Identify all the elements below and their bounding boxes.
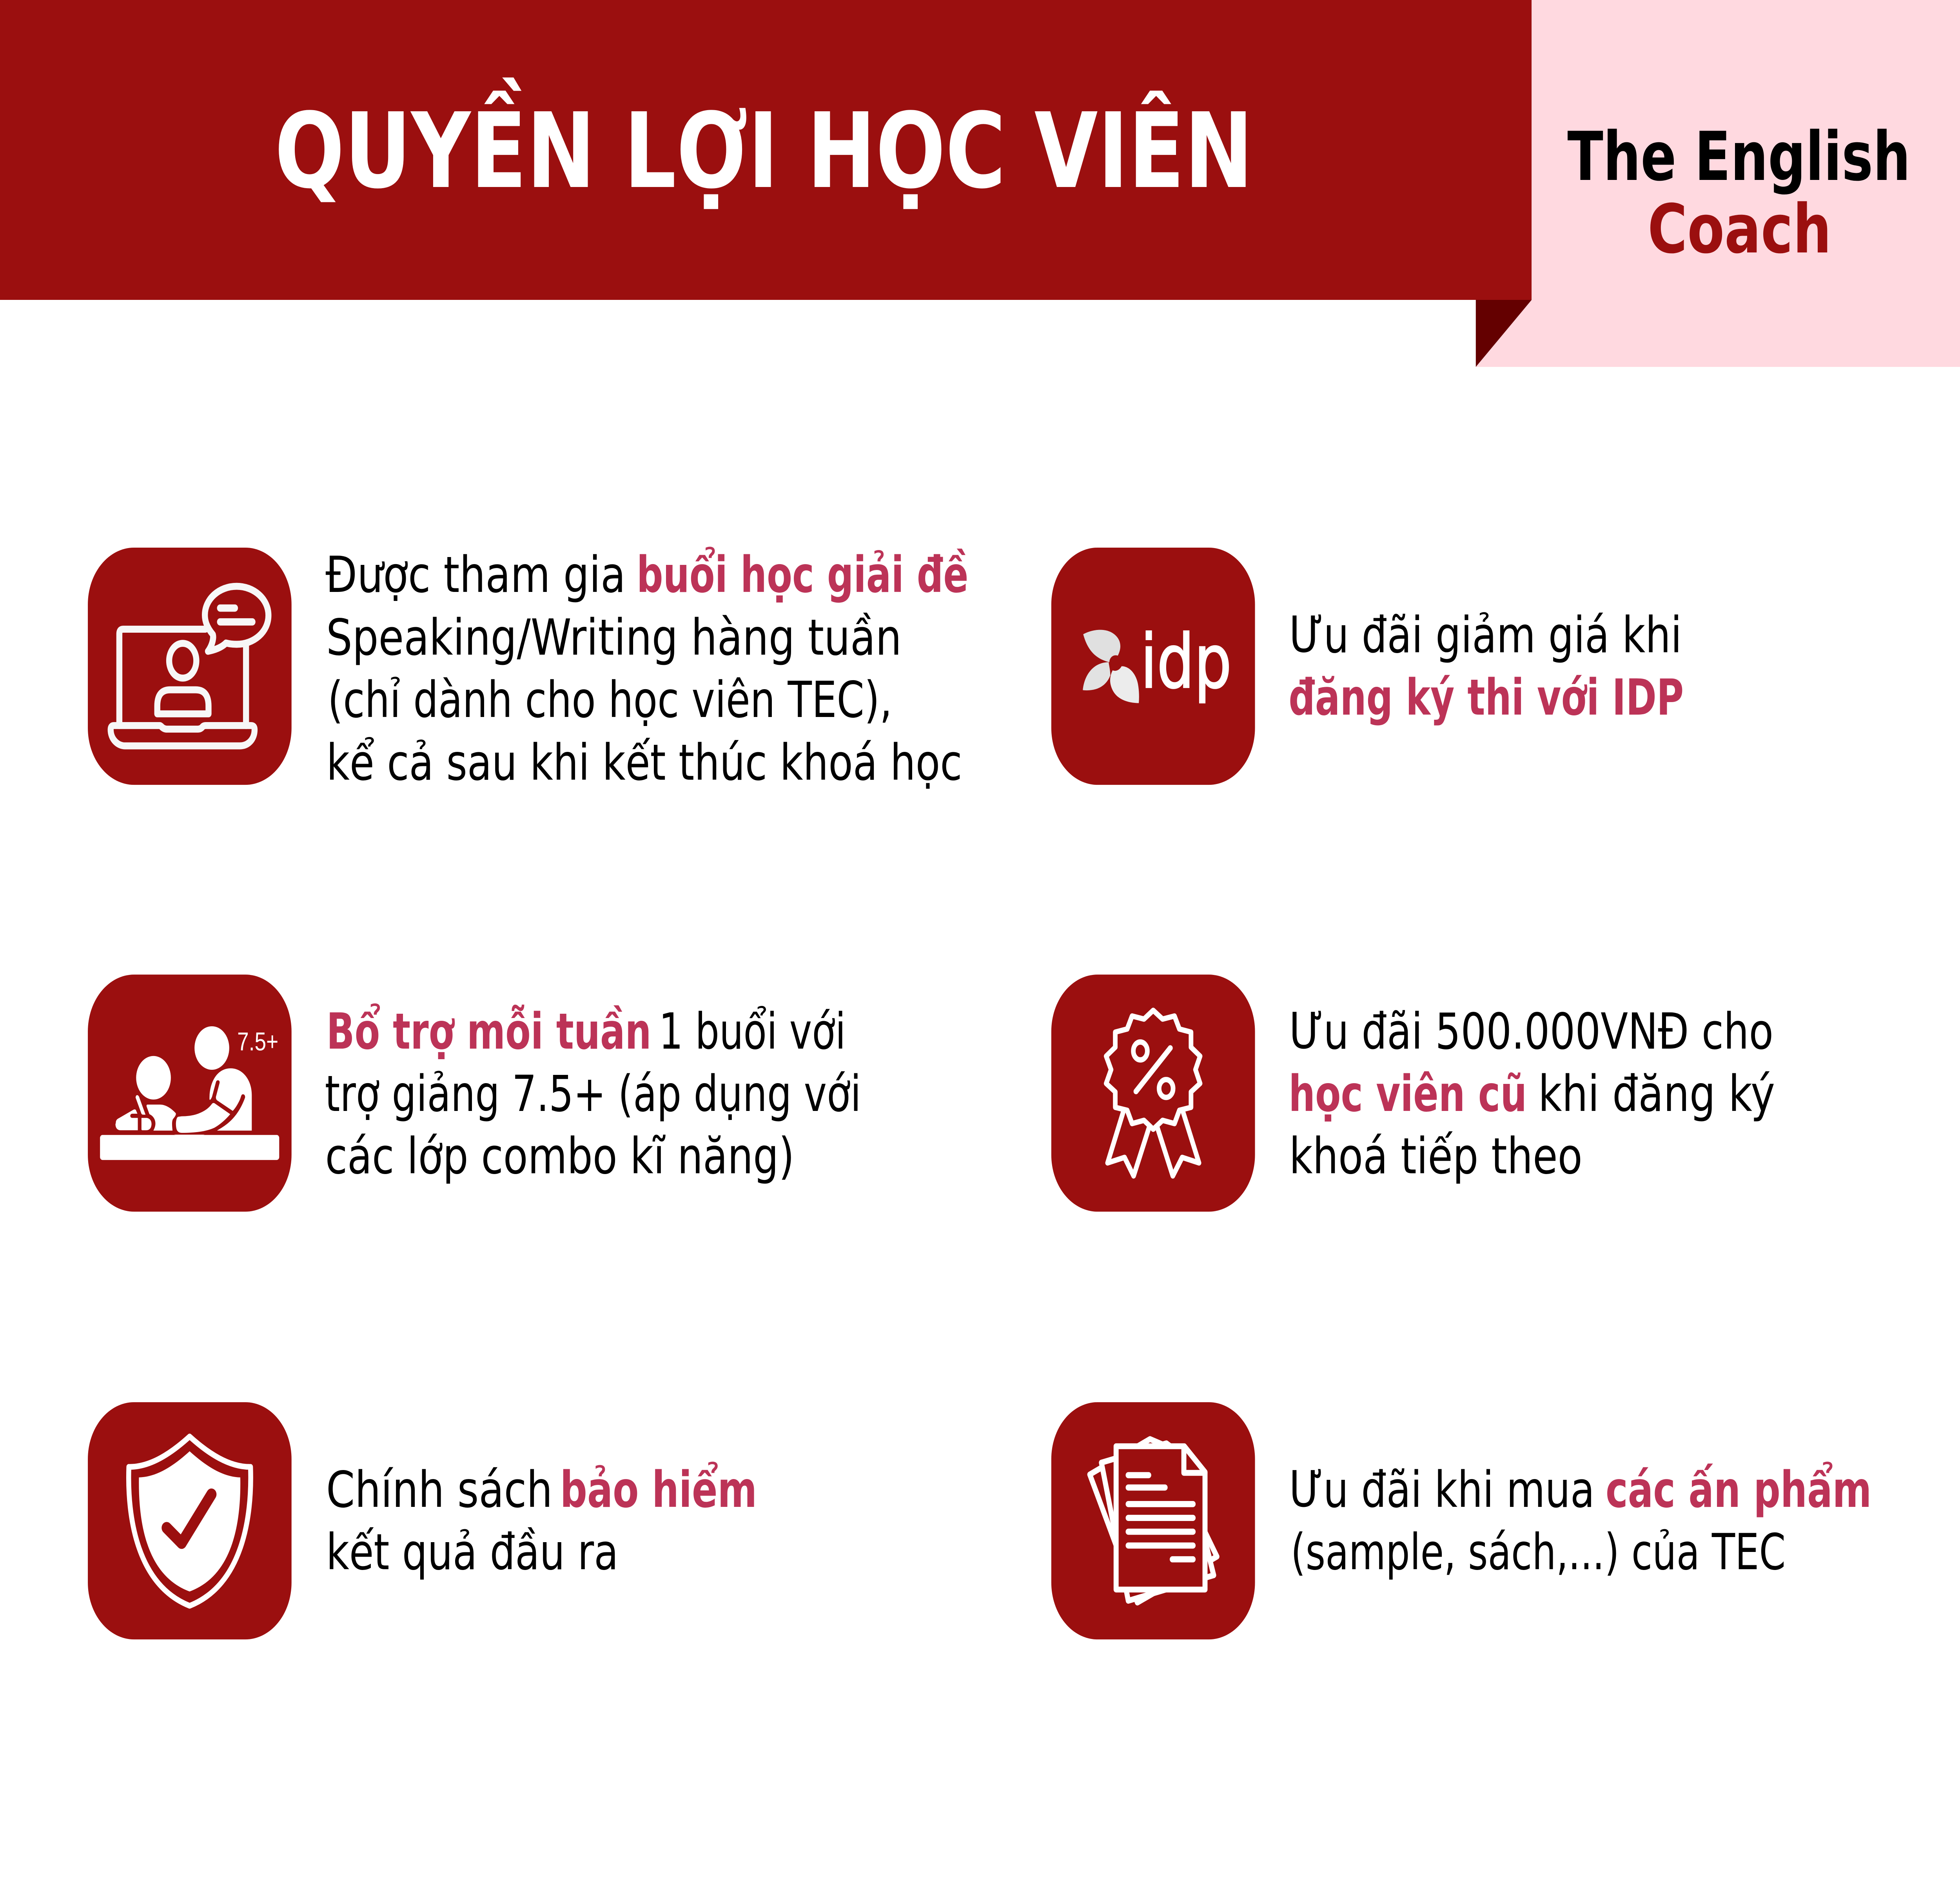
icon: laptop with speech bubble — [88, 548, 292, 785]
text: speaking writing sessions: buổi học giải đề — [637, 546, 968, 604]
benefit: publications discount — [1051, 1402, 1871, 1639]
text: publications discount: (sample, sách,...) của TEC — [1291, 1523, 1786, 1581]
benefit: speaking writing sessions — [88, 546, 968, 792]
text: insurance policy: Chính sách — [326, 1461, 553, 1519]
benefit: weekly tutoring — [88, 975, 861, 1212]
benefit: returning student discount — [1051, 975, 1775, 1212]
text: publications discount: Ưu đãi khi mua — [1289, 1461, 1595, 1519]
text: returning student discount — [1289, 1003, 1775, 1185]
text: weekly tutoring: Bổ trợ mỗi tuần — [327, 1003, 652, 1061]
text: insurance policy: bảo hiểm — [560, 1461, 757, 1519]
text: returning student discount: khoá tiếp theo — [1289, 1127, 1583, 1185]
text: IDP exam discount — [1289, 606, 1684, 727]
text: returning student discount: khi đăng ký — [1538, 1065, 1775, 1123]
text: speaking writing sessions — [325, 546, 968, 792]
logo text: The English — [1567, 117, 1911, 196]
title: QUYỀN LỢI HỌC VIÊN — [275, 77, 1253, 212]
benefit: IDP exam discount — [1051, 548, 1684, 785]
text: speaking writing sessions: Được tham gia — [325, 546, 626, 604]
benefit: insurance policy — [88, 1402, 757, 1639]
text: IDP exam discount: Ưu đãi giảm giá khi — [1289, 606, 1682, 664]
icon: discount badge — [1051, 975, 1255, 1212]
text: weekly tutoring: trợ giảng 7.5+ (áp dụng với — [325, 1065, 861, 1123]
icon: shield with check — [88, 1402, 292, 1639]
text: returning student discount: học viên cũ — [1289, 1065, 1527, 1123]
ribbon fold — [1476, 300, 1532, 367]
icon: tutor and student: 7.5+ — [237, 1027, 278, 1056]
icon: stacked documents — [1051, 1402, 1255, 1639]
header banner — [0, 0, 1532, 300]
logo text: Coach — [1648, 190, 1831, 269]
text: insurance policy: kết quả đầu ra — [326, 1523, 619, 1581]
text: publications discount — [1289, 1461, 1871, 1581]
icon: idp logo: idp — [1141, 619, 1232, 705]
logo text — [1567, 117, 1911, 269]
text: speaking writing sessions: (chỉ dành cho học viên TEC), — [328, 671, 892, 729]
text: insurance policy — [326, 1461, 757, 1581]
text: speaking writing sessions: Speaking/Writing hàng tuần — [326, 609, 902, 667]
text: IDP exam discount: đăng ký thi với IDP — [1289, 669, 1684, 727]
logo panel — [1476, 0, 1960, 367]
text: weekly tutoring: các lớp combo kĩ năng) — [325, 1127, 794, 1185]
text: weekly tutoring — [325, 1003, 861, 1185]
text: publications discount: các ấn phẩm — [1606, 1461, 1871, 1519]
icon: tutor and student — [88, 975, 292, 1212]
text: returning student discount: Ưu đãi 500.000VNĐ cho — [1289, 1003, 1773, 1061]
icon: idp logo — [1051, 548, 1255, 785]
text: weekly tutoring: 1 buổi với — [659, 1003, 846, 1061]
text: speaking writing sessions: kể cả sau khi kết thúc khoá học — [327, 734, 962, 792]
